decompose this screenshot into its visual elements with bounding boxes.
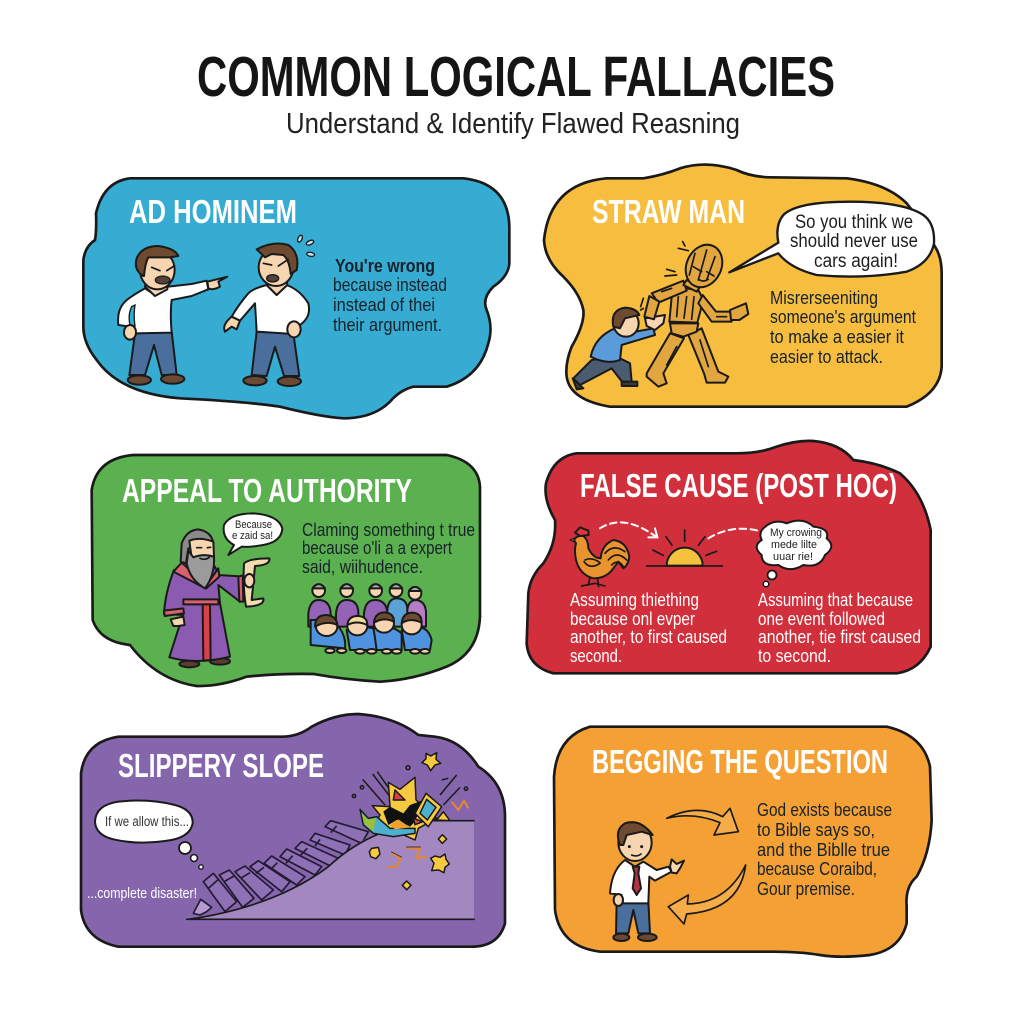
speech bubble: e zaid sa! — [232, 530, 273, 542]
panel shape: green — [92, 455, 480, 686]
text block: Gour premise. — [757, 879, 855, 899]
text block: right: one event followed — [758, 609, 885, 629]
caption: ...complete disaster! — [87, 885, 197, 902]
panel: appeal to authority — [92, 455, 480, 686]
thought bubble: If we allow this... — [105, 814, 189, 829]
figure: crowd of followers — [308, 584, 432, 654]
icon: crash explosion — [352, 753, 468, 890]
arrow: dashed rooster to sun — [600, 522, 655, 536]
thought bubble — [95, 801, 203, 869]
text block: to make a easier it — [770, 327, 904, 347]
text block: left: because onl evper — [570, 609, 695, 629]
text block: their argument. — [333, 315, 442, 335]
figure: man pointing — [610, 822, 684, 941]
speech bubble: Because — [235, 519, 272, 531]
text block — [757, 800, 892, 899]
speech bubble — [224, 513, 282, 555]
text block: easier to attack. — [770, 347, 883, 367]
text block: right: to second. — [758, 646, 831, 666]
heading: APPEAL TO AUTHORITY — [122, 472, 412, 509]
text block — [770, 288, 916, 367]
panel shape: red — [527, 441, 931, 673]
panel: ad hominem — [83, 178, 509, 418]
panel shape: orange — [554, 727, 932, 957]
text block: You're wrong — [335, 256, 435, 276]
figure: robed authority with scroll — [164, 529, 269, 667]
speech bubble: should never use — [790, 231, 918, 252]
speech bubble: cars again! — [814, 251, 898, 272]
text block: Misrerseeniting — [770, 288, 878, 308]
heading: BEGGING THE QUESTION — [592, 743, 888, 780]
thought cloud: mede lilte — [771, 539, 817, 551]
text block: left: second. — [570, 646, 622, 666]
text block: right — [758, 590, 921, 666]
text block — [302, 520, 475, 577]
heading: FALSE CAUSE (POST HOC) — [580, 467, 897, 504]
thought cloud: My crowing — [770, 527, 822, 539]
text block: right: Assuming that because — [758, 590, 913, 610]
text block: left — [570, 590, 727, 666]
text block: Claming something t true — [302, 520, 475, 540]
chart-like ramp — [187, 821, 474, 919]
thought cloud: uuar rie! — [773, 551, 813, 563]
panel shape: yellow — [544, 165, 942, 407]
heading: STRAW MAN — [592, 193, 745, 230]
figure: small man pushing — [573, 308, 665, 389]
speech bubble: So you think we — [795, 212, 913, 233]
panel: begging the question — [554, 727, 932, 957]
panel: slippery slope — [81, 714, 505, 947]
text block: God exists because — [757, 800, 892, 820]
panel shape: purple — [81, 714, 505, 947]
text block: to Bible says so, — [757, 820, 875, 840]
icon: motion marks — [641, 242, 688, 310]
text block: because Coraibd, — [757, 859, 877, 879]
icon: sunrise — [647, 530, 722, 566]
text block: because instead — [333, 275, 447, 295]
figure: wooden straw man — [644, 239, 748, 387]
text block: left: Assuming thiething — [570, 590, 699, 610]
icon: sweat drops — [297, 234, 315, 257]
text block: and the Biblle true — [757, 840, 890, 860]
panel: straw man — [544, 165, 942, 407]
icon: rooster — [570, 527, 629, 587]
text block: someone's argument — [770, 307, 916, 327]
panel: false cause — [527, 441, 931, 673]
thought cloud — [757, 521, 831, 587]
arrow: circular bottom — [668, 865, 746, 924]
text block — [333, 256, 447, 335]
subtitle: Understand & Identify Flawed Reasning — [286, 108, 740, 140]
heading: SLIPPERY SLOPE — [118, 747, 324, 784]
falling dominoes — [193, 821, 368, 915]
heading: AD HOMINEM — [129, 193, 297, 230]
figure: accusing man pointing — [118, 246, 227, 385]
text block: right: another, tie first caused — [758, 627, 921, 647]
text block: instead of thei — [333, 295, 435, 315]
arrow: circular top — [667, 808, 738, 835]
figure: flustered man — [224, 244, 309, 386]
text block: because o'li a a expert — [302, 538, 452, 558]
text block: said, wiihudence. — [302, 557, 423, 577]
text block: left: another, to first caused — [570, 627, 727, 647]
speech bubble — [729, 202, 934, 277]
panel shape: blue — [83, 178, 509, 418]
arrow: dashed sun to thought — [708, 529, 762, 538]
